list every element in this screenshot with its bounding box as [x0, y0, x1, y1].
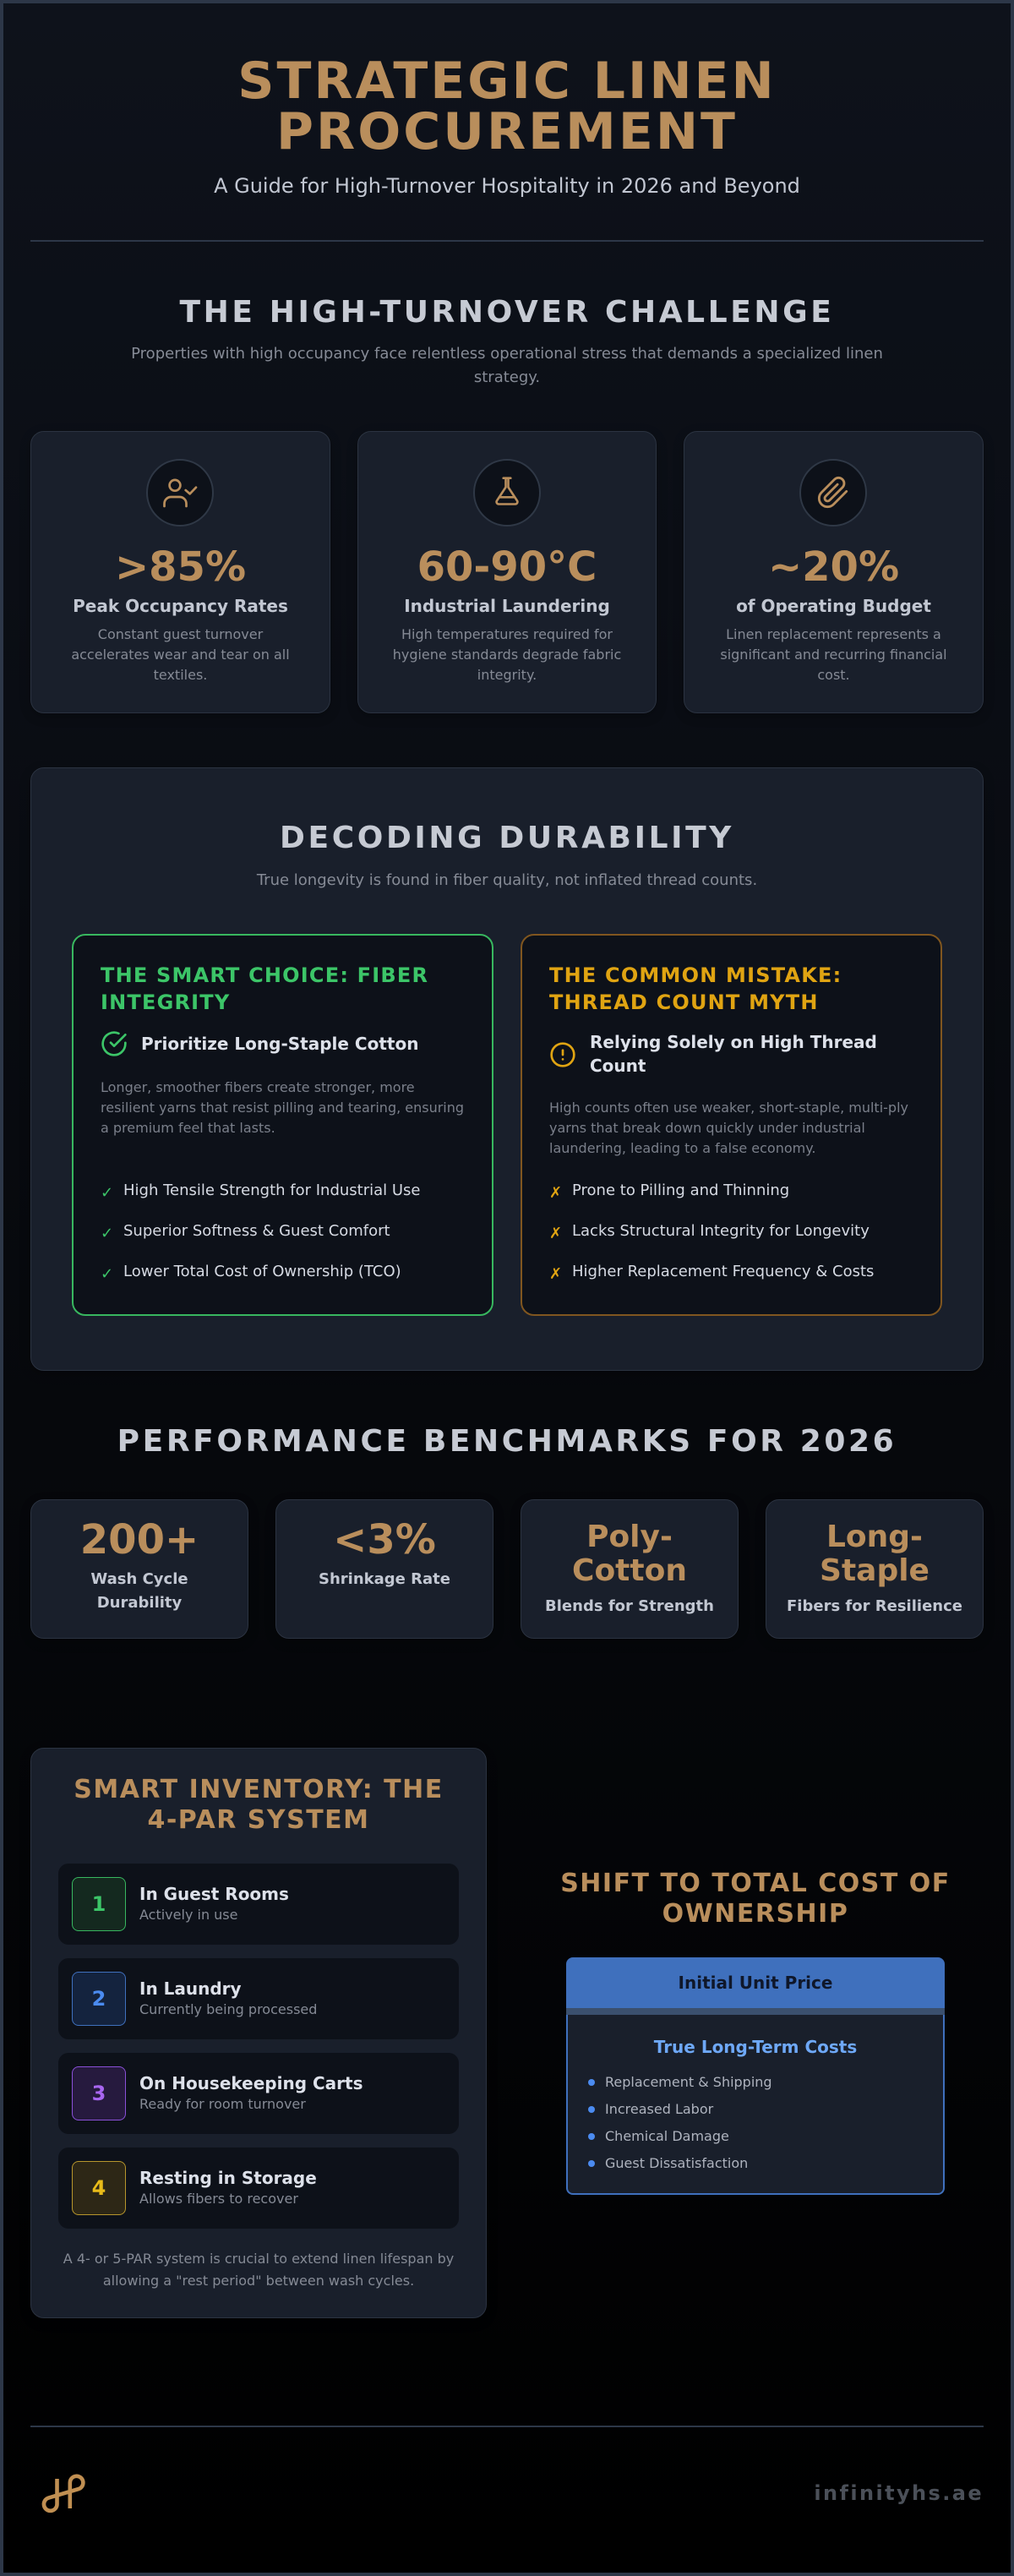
stat: poly-cotton	[572, 1520, 687, 1588]
list item: softness: ✓	[101, 1225, 113, 1242]
label: true long-term costs: True Long-Term Costs	[654, 2037, 857, 2057]
cost: guest dissatisfaction: Guest Dissatisfaction	[605, 2155, 748, 2171]
text: thread count description: yarns that break down quickly under industrial	[549, 1120, 865, 1136]
text: actively in use: Actively in use	[139, 1907, 237, 1923]
text: laundering description: integrity.	[477, 667, 537, 683]
label: shrinkage rate: Shrinkage Rate	[319, 1570, 450, 1588]
stat: 60-90°C: 60-90°C	[417, 543, 597, 591]
icon: flask	[473, 459, 541, 527]
subheading: high thread count	[590, 1032, 877, 1076]
label: industrial laundering: Industrial Laundering	[404, 596, 610, 616]
text: occupancy description: accelerates wear and tear on all	[71, 647, 290, 663]
text: inventory footnote: allowing a "rest period" between wash cycles.	[103, 2273, 414, 2289]
subheading: high thread count: Count	[590, 1056, 646, 1076]
footer: website: infinityhs.ae	[814, 2481, 984, 2505]
label: resting in storage: Resting in Storage	[139, 2168, 317, 2188]
stat: long-staple: Long-	[826, 1520, 923, 1554]
stat: 200+: 200+	[80, 1516, 199, 1564]
block: initial unit price	[566, 1957, 945, 2008]
text: occupancy description	[71, 626, 290, 683]
list item: replacement costs: ✗	[549, 1265, 562, 1283]
text: thread count description	[549, 1100, 908, 1156]
text: budget description	[720, 626, 947, 683]
badge: 3	[72, 2066, 126, 2120]
list item: lower TCO: Lower Total Cost of Ownership (TCO)	[123, 1263, 401, 1280]
heading: common mistake	[549, 963, 842, 1014]
step 3: on housekeeping carts	[58, 2053, 459, 2134]
subheading: long-staple cotton: Prioritize Long-Staple Cotton	[141, 1034, 418, 1054]
text: inventory footnote: A 4- or 5-PAR system is crucial to extend linen lifespan by	[63, 2251, 454, 2267]
badge: 4	[72, 2161, 126, 2215]
list item: pilling: ✗	[549, 1184, 562, 1202]
text: laundering description: hygiene standards degrade fabric	[393, 647, 621, 663]
badge: 1	[72, 1877, 126, 1931]
badge: 2	[72, 1972, 126, 2026]
list item: pilling: Prone to Pilling and Thinning	[572, 1182, 789, 1199]
text: budget description: Linen replacement represents a	[726, 626, 941, 642]
text: budget description: cost.	[817, 667, 850, 683]
text: durability intro: True longevity is found in fiber quality, not inflated thread counts.	[257, 871, 757, 889]
text: challenge intro: Properties with high occupancy face relentless operational stress that demands a specialized linen	[131, 345, 883, 363]
header: title and subtitle	[214, 52, 800, 198]
text: challenge intro: strategy.	[474, 368, 540, 386]
heading: smart choice: THE SMART CHOICE: FIBER	[101, 963, 428, 987]
label: wash cycle durability: Durability	[97, 1594, 182, 1612]
text: cotton description: Longer, smoother fibers create stronger, more	[101, 1079, 415, 1095]
cost: chemical damage: Chemical Damage	[605, 2128, 729, 2144]
badge: 2: 2	[92, 1987, 106, 2011]
badge: 1: 1	[92, 1892, 106, 1916]
block: initial unit price: Initial Unit Price	[679, 1973, 832, 1993]
text: ready for turnover: Ready for room turnover	[139, 2096, 306, 2112]
text: budget description: significant and recurring financial	[720, 647, 947, 663]
subheading: high thread count: Relying Solely on High Thread	[590, 1032, 877, 1052]
title	[237, 52, 777, 161]
icon: check circle	[101, 1031, 127, 1056]
text: thread count description: laundering, leading to a false economy.	[549, 1140, 816, 1156]
icon: paperclip	[799, 459, 867, 527]
heading: decoding durability: DECODING DURABILITY	[280, 821, 734, 855]
step 2: in laundry	[58, 1958, 459, 2039]
list item: tensile strength: High Tensile Strength for Industrial Use	[123, 1182, 421, 1199]
label: fibers for resilience: Fibers for Resilience	[787, 1597, 962, 1615]
cost: replacement: Replacement & Shipping	[605, 2074, 772, 2090]
text: laundering description: High temperatures required for	[401, 626, 613, 642]
panel: the common mistake	[521, 934, 942, 1316]
panel: benchmark long-staple	[766, 1499, 984, 1639]
label: peak occupancy: Peak Occupancy Rates	[73, 596, 288, 616]
title: STRATEGIC LINEN	[237, 52, 777, 111]
icon: infinity logo	[42, 2475, 85, 2513]
heading: smart inventory	[74, 1775, 444, 1835]
label: in guest rooms: In Guest Rooms	[139, 1884, 289, 1904]
heading: smart choice: INTEGRITY	[101, 991, 230, 1014]
panel: operating budget card	[684, 431, 984, 713]
text: cotton description	[101, 1079, 464, 1136]
badge: 3: 3	[92, 2082, 106, 2105]
text: allows fibers to recover: Allows fibers to recover	[139, 2191, 298, 2207]
label: wash cycle durability	[90, 1570, 188, 1612]
label: on housekeeping carts: On Housekeeping Carts	[139, 2073, 363, 2093]
panel: benchmark wash cycles	[30, 1499, 248, 1639]
stat: long-staple	[820, 1520, 930, 1588]
panel: smart inventory 4-par system	[30, 1748, 487, 2318]
cost: labor: Increased Labor	[605, 2101, 713, 2117]
label: wash cycle durability: Wash Cycle	[90, 1570, 188, 1588]
heading: total cost of ownership	[560, 1869, 951, 1929]
list item: structural integrity: Lacks Structural Integrity for Longevity	[572, 1222, 870, 1240]
list item: structural integrity: ✗	[549, 1225, 562, 1242]
panel: benchmark poly-cotton	[521, 1499, 739, 1639]
label: operating budget: of Operating Budget	[736, 596, 931, 616]
heading: smart inventory: 4-PAR SYSTEM	[147, 1805, 370, 1835]
text: being processed: Currently being processed	[139, 2001, 317, 2017]
list item: tensile strength: ✓	[101, 1184, 113, 1202]
label: blends for strength: Blends for Strength	[545, 1597, 714, 1615]
panel: decoding durability	[30, 767, 984, 1371]
list item: replacement costs: Higher Replacement Frequency & Costs	[572, 1263, 874, 1280]
list item: lower TCO: ✓	[101, 1265, 113, 1283]
panel: peak occupancy card	[30, 431, 330, 713]
text: challenge intro	[131, 345, 883, 386]
text: inventory footnote	[63, 2251, 454, 2289]
list item: softness: Superior Softness & Guest Comfort	[123, 1222, 390, 1240]
stat: >85%: >85%	[115, 543, 246, 591]
step 1: in guest rooms	[58, 1864, 459, 1945]
stat: poly-cotton: Cotton	[572, 1553, 687, 1588]
text: thread count description: High counts often use weaker, short-staple, multi-ply	[549, 1100, 908, 1116]
heading: total cost of ownership: SHIFT TO TOTAL COST OF	[560, 1869, 951, 1898]
text: cotton description: a premium feel that lasts.	[101, 1120, 275, 1136]
heading: the high-turnover challenge: THE HIGH-TURNOVER CHALLENGE	[179, 295, 835, 330]
panel: industrial laundering card	[357, 431, 657, 713]
badge: 4: 4	[92, 2176, 106, 2200]
chart: total cost iceberg	[566, 1957, 945, 2195]
heading: smart inventory: SMART INVENTORY: THE	[74, 1775, 444, 1804]
heading: smart choice	[101, 963, 428, 1014]
icon: alert circle	[550, 1042, 575, 1067]
subtitle: A Guide for High-Turnover Hospitality in 2026 and Beyond	[214, 174, 800, 198]
step 4: resting in storage	[58, 2148, 459, 2229]
icon: guest check	[146, 459, 214, 527]
stat: long-staple: Staple	[820, 1553, 930, 1588]
stat: poly-cotton: Poly-	[586, 1520, 673, 1554]
label: in laundry: In Laundry	[139, 1978, 242, 1999]
text: occupancy description: textiles.	[154, 667, 207, 683]
text: occupancy description: Constant guest turnover	[98, 626, 263, 642]
stat: ~20%: ~20%	[768, 543, 899, 591]
text: cotton description: resilient yarns that resist pilling and tearing, ensuring	[101, 1100, 464, 1116]
panel: the smart choice	[72, 934, 493, 1316]
panel: benchmark shrinkage	[275, 1499, 493, 1639]
text: laundering description	[393, 626, 621, 683]
heading: total cost of ownership: OWNERSHIP	[662, 1899, 848, 1929]
heading: common mistake: THREAD COUNT MYTH	[549, 991, 819, 1014]
heading: performance benchmarks: PERFORMANCE BENCHMARKS FOR 2026	[117, 1424, 897, 1459]
block: true long-term costs	[566, 2015, 945, 2195]
heading: common mistake: THE COMMON MISTAKE:	[549, 963, 842, 987]
title: PROCUREMENT	[276, 102, 738, 161]
stat: <3%: <3%	[333, 1516, 436, 1564]
